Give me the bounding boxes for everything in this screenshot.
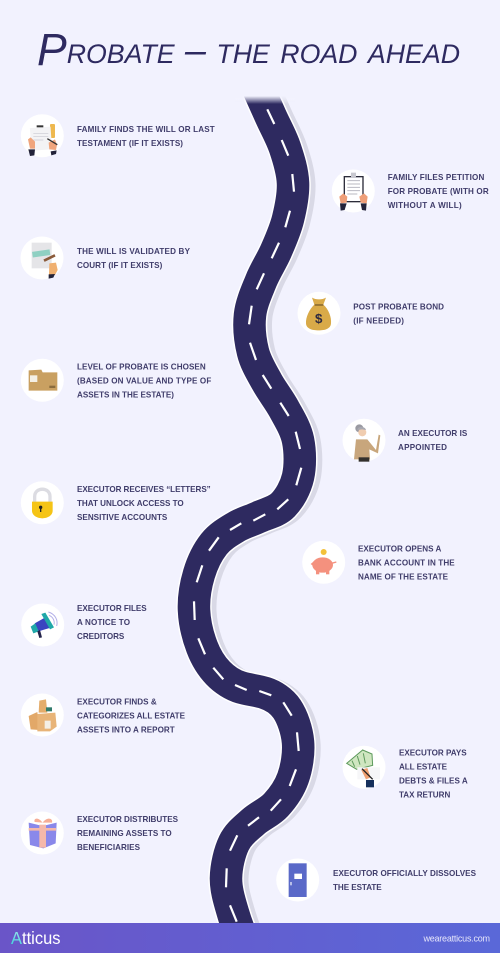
text	[333, 869, 477, 892]
text: BENEFICIARIES	[77, 843, 141, 852]
text: BANK ACCOUNT IN THE	[358, 558, 455, 567]
road	[194, 88, 306, 946]
icon: padlock	[32, 489, 53, 518]
text: LEVEL OF PROBATE IS CHOSEN	[77, 363, 206, 372]
step: bank account	[302, 541, 455, 584]
text	[353, 302, 444, 325]
text: SENSITIVE ACCOUNTS	[77, 513, 168, 522]
text	[388, 173, 489, 210]
website: weareatticus.com	[422, 934, 490, 944]
title: P	[37, 24, 67, 75]
text: EXECUTOR FINDS &	[77, 697, 157, 706]
icon: money bag	[306, 298, 331, 330]
step: will validated by court	[20, 236, 191, 280]
text: EXECUTOR DISTRIBUTES	[77, 815, 179, 824]
step: distributes remaining assets	[21, 812, 179, 854]
step: dissolves the estate	[276, 858, 477, 902]
text: NAME OF THE ESTATE	[358, 572, 449, 581]
text: EXECUTOR FILES	[77, 604, 147, 613]
text: ASSETS INTO A REPORT	[77, 725, 175, 734]
text	[358, 544, 455, 581]
icon: stamp on document	[32, 243, 58, 279]
text: THE WILL IS VALIDATED BY	[77, 247, 191, 256]
step: an executor is appointed	[342, 419, 468, 462]
logo: Atticus: Atticus	[11, 928, 61, 948]
icon: will document with hands	[28, 124, 57, 156]
icon: gift box	[29, 819, 57, 848]
text: (BASED ON VALUE AND TYPE OF	[77, 377, 211, 386]
text: CREDITORS	[77, 632, 125, 641]
step: level of probate chosen	[21, 359, 211, 402]
text	[77, 815, 179, 852]
text: APPOINTED	[398, 443, 447, 452]
text	[77, 363, 211, 400]
icon: piggy bank	[311, 549, 336, 574]
text: POST PROBATE BOND	[353, 302, 444, 311]
step: post probate bond	[298, 292, 444, 335]
text	[399, 749, 468, 800]
text: EXECUTOR PAYS	[399, 749, 467, 758]
title: robate – the road ahead	[67, 30, 460, 72]
step: family finds the will	[21, 114, 215, 157]
icon: executor woman	[354, 424, 380, 462]
text	[77, 125, 215, 148]
icon: door	[289, 863, 307, 897]
step: executor receives letters	[21, 481, 211, 524]
icon: megaphone	[31, 612, 57, 638]
icon: clipboard held by hands	[339, 173, 368, 211]
text: (IF NEEDED)	[353, 316, 404, 325]
text	[77, 697, 186, 734]
text: DEBTS & FILES A	[399, 777, 468, 786]
text: COURT (IF IT EXISTS)	[77, 261, 163, 270]
step: pays debts	[342, 746, 468, 800]
text: ASSETS IN THE ESTATE)	[77, 391, 174, 400]
text: FAMILY FINDS THE WILL OR LAST	[77, 125, 215, 134]
step: finds and categorizes assets	[21, 694, 186, 736]
text: WITHOUT A WILL)	[388, 201, 462, 210]
step: family files petition	[332, 170, 489, 212]
icon: money bag: $	[315, 311, 323, 326]
text: ALL ESTATE	[399, 763, 448, 772]
step: notice to creditors	[21, 604, 147, 646]
text: THAT UNLOCK ACCESS TO	[77, 499, 184, 508]
text: AN EXECUTOR IS	[398, 429, 468, 438]
text: TAX RETURN	[399, 791, 450, 800]
text: TESTAMENT (IF IT EXISTS)	[77, 139, 183, 148]
icon: stacked boxes	[29, 699, 57, 731]
text: EXECUTOR OFFICIALLY DISSOLVES	[333, 869, 477, 878]
text	[77, 604, 147, 641]
footer bar	[0, 923, 500, 953]
text: FAMILY FILES PETITION	[388, 173, 484, 182]
text: FOR PROBATE (WITH OR	[388, 187, 489, 196]
text: THE ESTATE	[333, 883, 382, 892]
text: CATEGORIZES ALL ESTATE	[77, 711, 186, 720]
text: REMAINING ASSETS TO	[77, 829, 172, 838]
text: A NOTICE TO	[77, 618, 130, 627]
text: EXECUTOR RECEIVES “LETTERS”	[77, 485, 211, 494]
text	[77, 247, 191, 270]
text: EXECUTOR OPENS A	[358, 544, 441, 553]
text	[77, 485, 211, 522]
icon: folder	[29, 370, 57, 391]
text	[398, 429, 468, 452]
icon: money and hand signing	[347, 750, 380, 787]
